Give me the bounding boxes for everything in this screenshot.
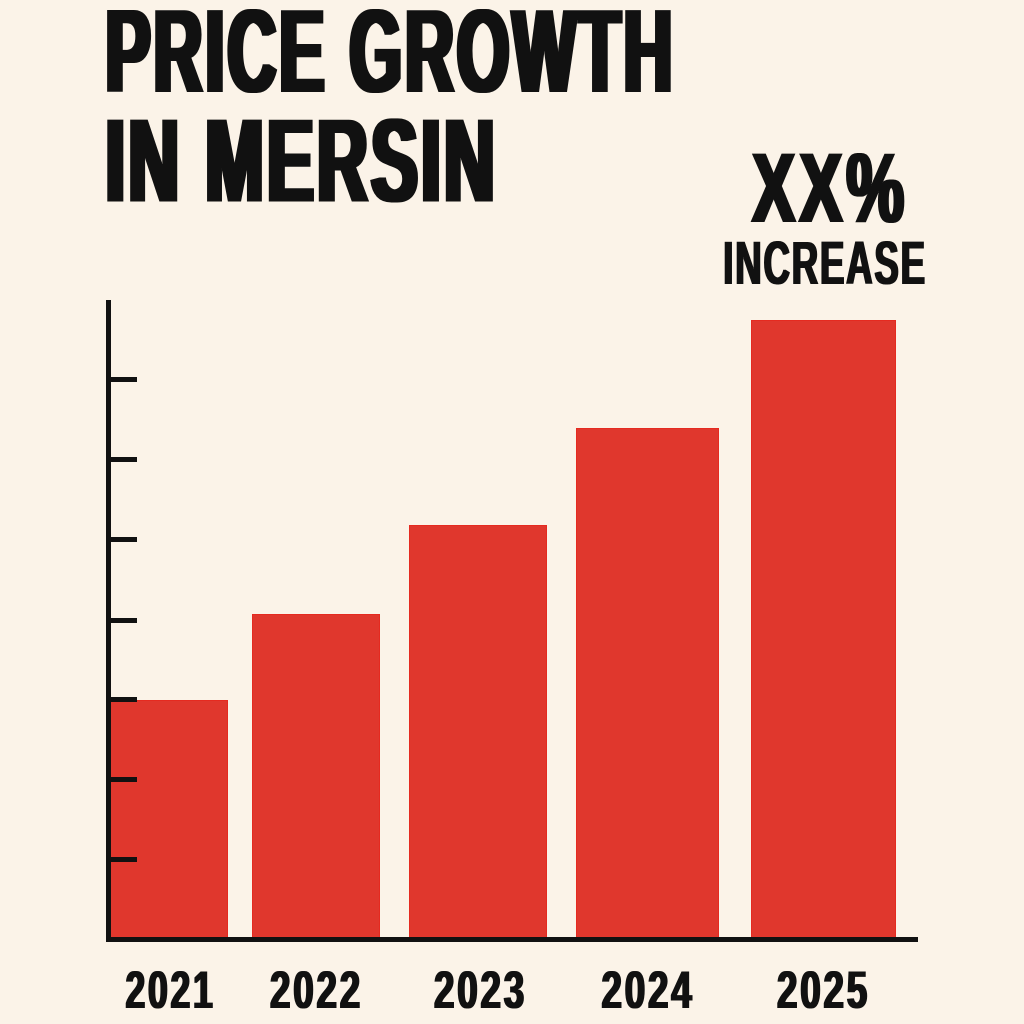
callout: XX% increase (723, 132, 927, 297)
label 2022: 2022 (270, 961, 363, 1020)
label 2023: 2023 (434, 961, 527, 1020)
big figure XX%: XX% (752, 132, 908, 243)
x axis (106, 937, 918, 942)
bar chart (106, 300, 918, 1020)
bar 2023 (410, 526, 546, 938)
title: IN MERSIN (106, 94, 498, 228)
bar 2025 (752, 320, 896, 938)
label 2021: 2021 (126, 961, 216, 1020)
title (106, 0, 676, 228)
y axis with ticks (106, 300, 137, 941)
bar 2022 (252, 614, 380, 938)
year labels (126, 961, 870, 1020)
label 2024: 2024 (602, 961, 694, 1020)
bar 2021 (110, 700, 228, 938)
bar 2024 (576, 428, 718, 938)
label 2025: 2025 (777, 961, 870, 1020)
